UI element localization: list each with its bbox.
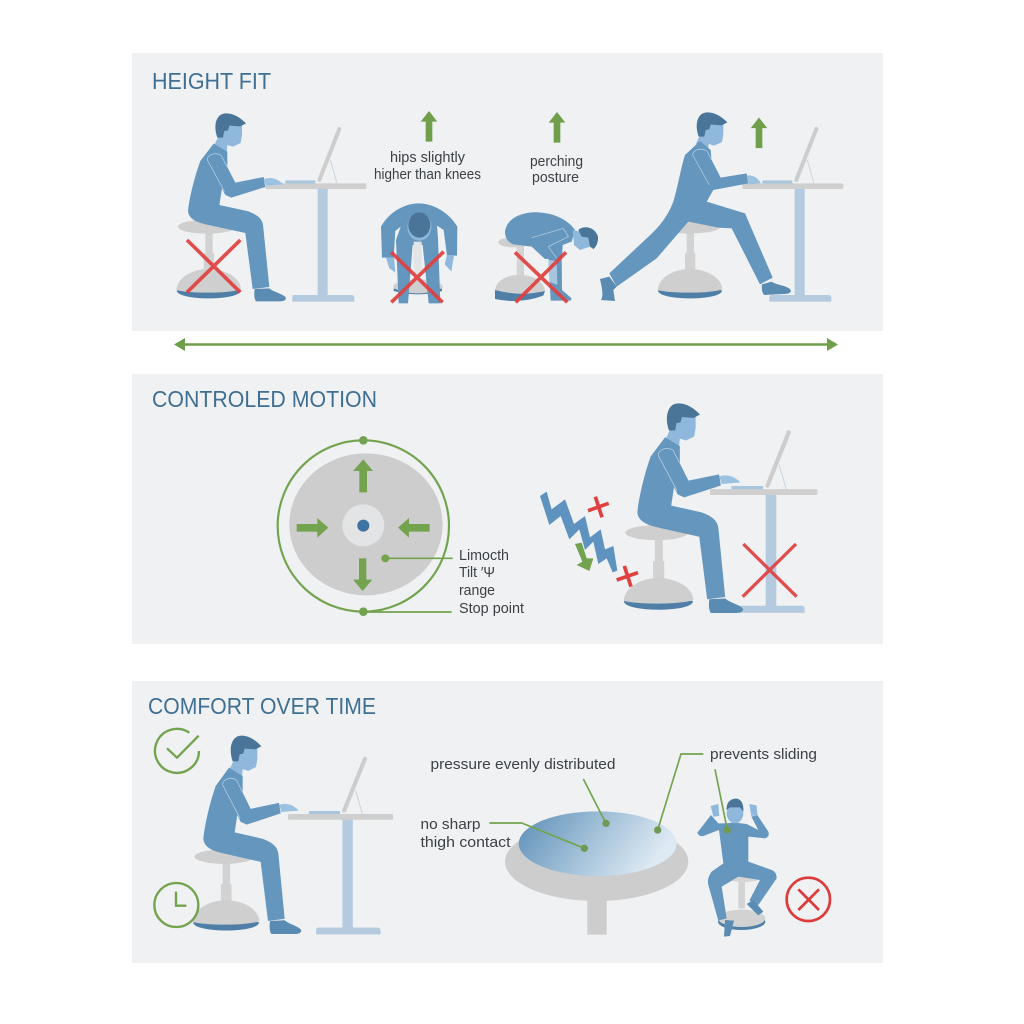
label: perching posture: posture (532, 170, 579, 186)
diagram: seat pressure (489, 754, 703, 935)
labels: seat pressure: prevents sliding (710, 747, 817, 763)
icon: up arrow (751, 118, 767, 148)
panel: height fit (132, 53, 883, 331)
diagram: tilt range (278, 436, 453, 616)
label: hips slightly higher than knees: higher than knees (374, 167, 481, 183)
label: hips slightly higher than knees (374, 150, 481, 183)
figure: bent forward front view (381, 203, 457, 303)
panel: comfort over time (132, 681, 883, 963)
panel: controlled motion (132, 374, 883, 644)
labels: tilt diagram: Stop point (459, 601, 524, 617)
labels: tilt diagram (459, 548, 524, 617)
icon: red x (743, 544, 797, 597)
icon: red crosses (588, 497, 638, 587)
heading: height fit: HEIGHT FIT (152, 68, 271, 94)
figure: bent forward side view (495, 212, 598, 302)
heading: comfort over time: COMFORT OVER TIME (148, 693, 376, 719)
icon: jolt lightning (540, 492, 617, 572)
figure: sliding on stool (697, 769, 777, 937)
arrow: height range (174, 338, 838, 351)
icon: clock (154, 883, 198, 927)
labels: seat pressure (420, 747, 817, 851)
icon: check circle (155, 729, 199, 773)
heading: controled motion: CONTROLED MOTION (152, 386, 377, 412)
figure: uncontrolled motion (540, 403, 817, 613)
figure: comfortable seated posture (193, 736, 393, 934)
icon: up arrow (421, 111, 437, 142)
label: perching posture (530, 154, 583, 186)
icon: red x circle (787, 878, 830, 921)
label: hips slightly higher than knees: hips slightly (390, 150, 466, 166)
labels: seat pressure: thigh contact (420, 835, 510, 851)
figure: correct perching posture (600, 112, 843, 302)
labels: seat pressure: no sharp (420, 817, 480, 833)
labels: tilt diagram: Limocth (459, 548, 509, 564)
labels: tilt diagram: Tilt ′Ψ (459, 565, 495, 581)
icon: up arrow (549, 112, 565, 143)
labels: tilt diagram: range (459, 583, 495, 599)
icon: down arrow (575, 543, 593, 571)
figure: seated too low on stool (176, 113, 366, 302)
labels: seat pressure: pressure evenly distributed (430, 757, 616, 773)
label: perching posture: perching (530, 154, 583, 170)
